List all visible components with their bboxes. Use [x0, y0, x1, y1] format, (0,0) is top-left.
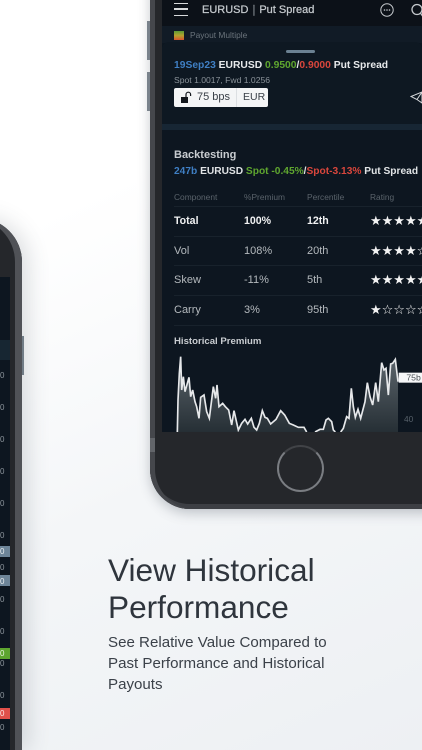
left phone column of numbers: 0 — [0, 435, 4, 444]
historical premium heading: Historical Premium — [174, 336, 261, 347]
left phone column of numbers: 0 — [0, 547, 4, 556]
left phone column of numbers: 0 — [0, 627, 4, 636]
icon: menu — [174, 3, 188, 16]
icon: colour scale — [174, 31, 184, 40]
table header: %Premium — [244, 192, 285, 202]
red value tag — [0, 708, 10, 719]
chart value tag: 75b — [406, 373, 421, 383]
top navigation bar — [162, 0, 422, 26]
table header: Rating — [370, 192, 394, 202]
row: vol: 20th — [307, 245, 328, 257]
headline — [108, 552, 315, 624]
row: vol: Vol — [174, 245, 189, 257]
left phone column of numbers: 0 — [0, 499, 4, 508]
caption — [108, 552, 327, 693]
right phone upper volume button — [147, 21, 150, 60]
left phone column of numbers: 0 — [0, 659, 4, 668]
row: vol: 108% — [244, 245, 272, 257]
row: skew: -11% — [244, 274, 269, 286]
backtesting heading: Backtesting — [174, 149, 236, 161]
currency: EUR — [243, 91, 265, 103]
right phone lower side button — [150, 438, 155, 452]
left phone column of numbers: 0 — [0, 531, 4, 540]
left phone column of numbers: 0 — [0, 649, 4, 658]
row: total — [174, 206, 422, 236]
row: carry: 95th — [307, 304, 328, 316]
nav title: EURUSD | Put Spread — [202, 4, 314, 16]
left phone column of numbers: 0 — [0, 595, 4, 604]
table header — [174, 192, 394, 202]
table header: Component — [174, 192, 217, 202]
description: Payouts — [108, 676, 163, 693]
row: carry: Carry — [174, 304, 201, 316]
row: vol — [174, 236, 422, 266]
payout multiple legend — [162, 26, 422, 43]
description: See Relative Value Compared to — [108, 634, 327, 651]
home button — [277, 445, 324, 492]
left phone — [0, 218, 22, 750]
blue value tag 2 — [0, 575, 10, 586]
icon: send — [410, 92, 422, 104]
left phone column of numbers: 0 — [0, 467, 4, 476]
row: skew — [174, 265, 422, 295]
left phone column of numbers: 0 — [0, 723, 4, 732]
backtesting summary: 247b EURUSD Spot -0.45%/Spot-3.13% Put Spread — [174, 166, 418, 177]
trade title: 19Sep23 EURUSD 0.9500/0.9000 Put Spread — [174, 60, 388, 71]
historical premium chart — [176, 356, 422, 432]
icon: more options — [380, 3, 394, 17]
left phone column of numbers: 0 — [0, 691, 4, 700]
green value tag — [0, 648, 10, 659]
right phone — [150, 0, 422, 509]
left phone column of numbers: 0 — [0, 709, 4, 718]
bps value: 75 bps — [197, 91, 230, 103]
section divider — [162, 124, 422, 130]
left phone screen — [0, 277, 10, 750]
left phone column of numbers — [0, 371, 4, 732]
headline: Performance — [108, 588, 289, 624]
left phone side button — [22, 336, 24, 375]
blue value tag 1 — [0, 546, 10, 557]
row: total: Total — [174, 215, 199, 227]
icon: search — [411, 4, 422, 16]
right phone lower volume button — [147, 72, 150, 111]
trade card — [162, 42, 422, 124]
drag handle — [286, 50, 315, 53]
row: carry: 3% — [244, 304, 260, 316]
icon: unlocked padlock — [181, 92, 192, 103]
chart value tag — [399, 373, 422, 383]
spot and forward: Spot 1.0017, Fwd 1.0256 — [174, 75, 270, 85]
currency — [236, 88, 265, 107]
legend label: Payout Multiple — [190, 30, 247, 40]
headline: View Historical — [108, 552, 315, 588]
screen header band — [0, 340, 10, 360]
row: total: 100% — [244, 215, 271, 227]
row: carry — [174, 295, 422, 326]
left phone column of numbers: 0 — [0, 563, 4, 572]
left phone column of numbers: 0 — [0, 371, 4, 380]
description — [108, 634, 327, 693]
left phone column of numbers: 0 — [0, 577, 4, 586]
description: Past Performance and Historical — [108, 655, 324, 672]
row: skew: 5th — [307, 274, 322, 286]
left phone column of numbers: 0 — [0, 403, 4, 412]
chart axis label: 40 — [404, 414, 414, 424]
right phone screen — [162, 0, 422, 432]
bps selector — [174, 88, 268, 107]
row: skew: Skew — [174, 274, 201, 286]
table header: Percentile — [307, 192, 344, 202]
backtesting panel — [162, 130, 422, 432]
row: total: 12th — [307, 215, 329, 227]
